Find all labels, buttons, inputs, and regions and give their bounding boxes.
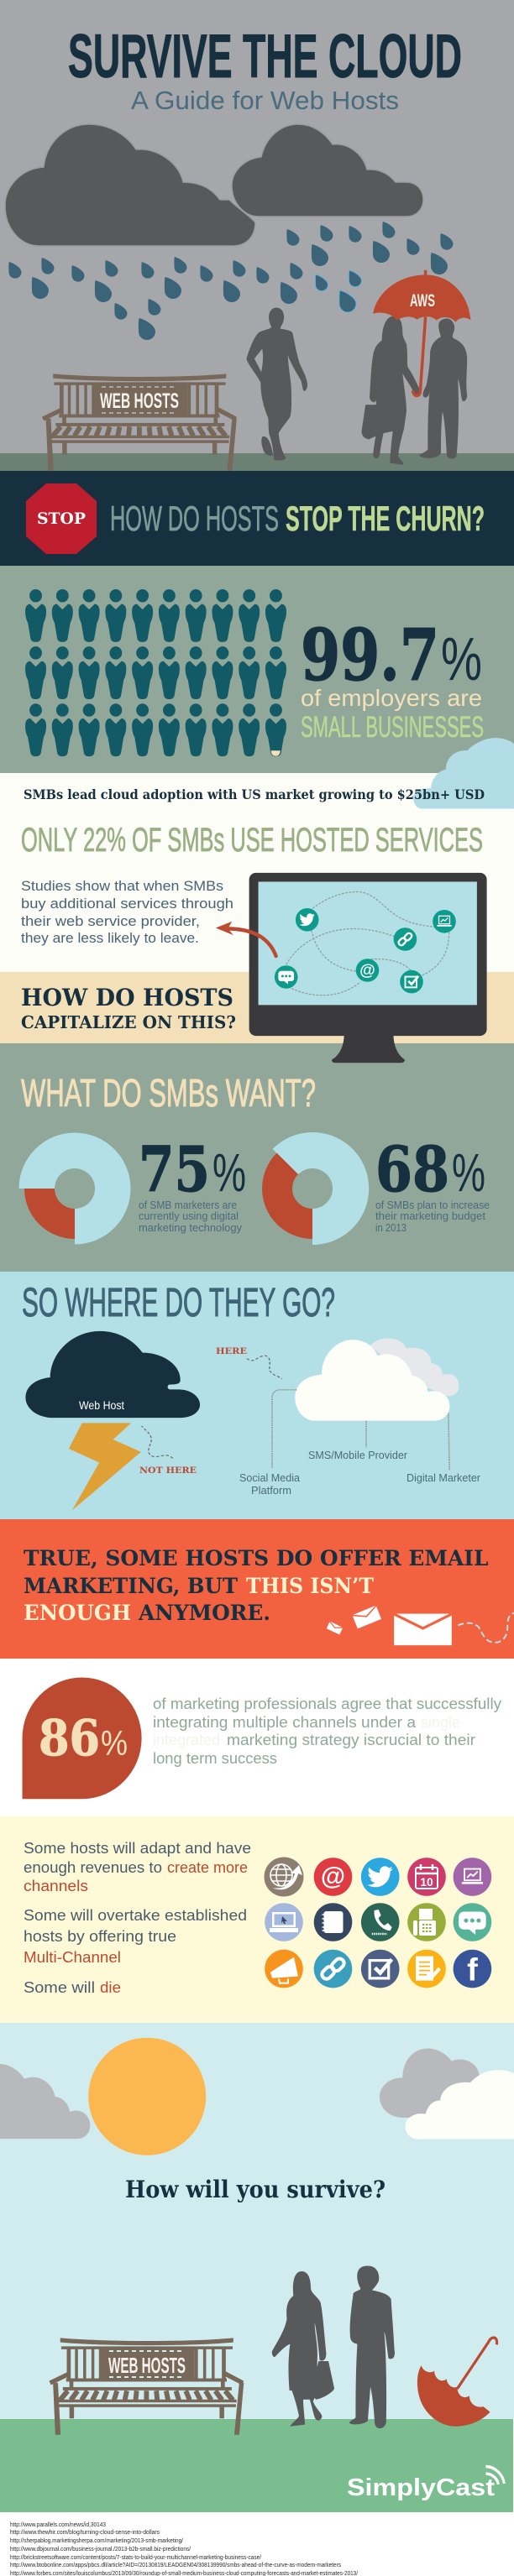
- text: adapt and overtake: Multi-Channel: [24, 1949, 121, 1966]
- text: SMB marketers: currently using digital: [139, 1210, 239, 1222]
- heading: true some hosts: MARKETING, BUT: [24, 1574, 238, 1599]
- icon: link: [314, 1950, 352, 1988]
- panel: sunny closing scene: [0, 2023, 514, 2512]
- person: walking woman: [247, 307, 307, 460]
- heading: how do hosts capitalize: [21, 984, 236, 1032]
- text: adapt and overtake: Some hosts will adapt and have: [24, 1840, 251, 1857]
- icon: large storm cloud: [5, 124, 255, 246]
- panel: stop the churn banner: [0, 471, 514, 566]
- icon: facebook: [454, 1950, 491, 1988]
- icon: telephone: [361, 1903, 400, 1941]
- labels: channel providers: Social Media: [239, 1471, 301, 1484]
- text: studies: Studies show that when SMBs: [21, 878, 223, 894]
- icon: twitter: [361, 1858, 400, 1896]
- text: adapt and overtake: create more: [167, 1859, 248, 1876]
- text: SMBs budget: in 2013: [375, 1222, 406, 1234]
- icon: monitor body: [216, 873, 487, 1063]
- text: marketing professionals: of marketing professionals agree that successfully: [153, 1696, 501, 1712]
- icon: megaphone: [265, 1950, 303, 1988]
- statistic: 68%: %: [452, 1142, 485, 1203]
- icon: laptop cursor: [265, 1903, 303, 1941]
- text: SMB marketers: [139, 1199, 243, 1234]
- person: woman with bag: [272, 2271, 334, 2427]
- icon: web host cloud: [25, 1331, 200, 1418]
- callout: 86%: [23, 1677, 142, 1799]
- text: SMB marketers: of SMB marketers are: [139, 1199, 237, 1211]
- bench: web hosts closing: WEB HOSTS: [108, 2353, 186, 2378]
- callout: 86%: 86: [39, 1709, 100, 1767]
- arrow: not here: [142, 1426, 173, 1458]
- icon: notebook: [314, 1903, 352, 1941]
- panel: rainy scene header: [0, 0, 514, 471]
- panel: what do SMBs want: [0, 1043, 514, 1272]
- icon: stop sign: STOP: [37, 509, 86, 528]
- heading: how will you survive: How will you survive?: [125, 2176, 386, 2203]
- icon: check box: [361, 1950, 400, 1988]
- panel: 86 percent statistic: [0, 1659, 514, 1816]
- heading: how do hosts stop the churn: HOW DO HOSTS: [110, 499, 279, 538]
- bench: web hosts: WEB HOSTS: [100, 389, 179, 413]
- icon: stop sign: [26, 483, 97, 554]
- label: here: HERE: [216, 1346, 247, 1356]
- text: studies: buy additional services through: [21, 896, 233, 912]
- labels: channel providers: SMS/Mobile Provider: [308, 1449, 408, 1461]
- icon: speech node: [275, 965, 297, 989]
- icon: fax: [407, 1903, 446, 1941]
- text: adapt and overtake: [24, 1840, 251, 1996]
- icon: sun: [88, 2038, 206, 2155]
- icon: AWS umbrella: AWS: [410, 291, 435, 311]
- text: marketing professionals: [153, 1696, 501, 1767]
- panel: hosted services: [0, 738, 514, 1043]
- text: marketing professionals: single: [421, 1714, 460, 1731]
- pictogram: people grid: [25, 589, 286, 756]
- text: marketing professionals: integrating multiple channels under a: [153, 1714, 417, 1731]
- text: SMBs budget: their marketing budget: [375, 1210, 486, 1222]
- icon: at node: @: [359, 962, 375, 980]
- label: not here: NOT HERE: [139, 1466, 197, 1476]
- icon: calendar: [407, 1858, 446, 1896]
- heading: true some hosts: THIS ISN’T: [246, 1574, 374, 1599]
- text: adapt and overtake: enough revenues to: [24, 1859, 162, 1876]
- icon: document: [407, 1950, 446, 1988]
- icon: at sign: @: [321, 1863, 345, 1890]
- sources list: [10, 2522, 358, 2576]
- icon: fallen umbrella: [417, 2338, 497, 2427]
- heading: true some hosts: [24, 1546, 489, 1626]
- text: studies: [21, 878, 233, 946]
- text: marketing professionals: marketing strategy iscrucial to their: [227, 1732, 475, 1748]
- icon: at sign: [314, 1858, 352, 1896]
- icon: at node: [356, 959, 379, 982]
- icon: calendar: 10: [420, 1875, 433, 1889]
- icon: globe: [264, 1857, 304, 1897]
- icon: envelopes: [326, 1605, 514, 1645]
- sources list: http://sherpablog.marketingsherpa.com/marketing/2013-smb-marketing/: [10, 2538, 183, 2544]
- icon: twitter node: [296, 908, 319, 932]
- person: woman with bag: [362, 316, 419, 465]
- statistic: 75%: 75: [139, 1134, 210, 1206]
- text: adapt and overtake: die: [100, 1979, 121, 1996]
- icon: small storm cloud: [232, 124, 423, 217]
- labels: channel providers: Digital Marketer: [406, 1471, 481, 1484]
- icon group: monitor with network: [216, 873, 487, 1063]
- heading: true some hosts: ENOUGH: [24, 1601, 131, 1626]
- statistic: 99.7%: 99.7: [301, 614, 439, 697]
- sources list: http://www.btobonline.com/apps/pbcs.dll/article?AID=/20130819/LEADGEN04/308139990/smbs-ahead-of-the-curve-as-modern-marketers: [10, 2563, 341, 2568]
- arrow: here: [247, 1356, 282, 1379]
- heading: how do hosts capitalize: CAPITALIZE ON THIS?: [21, 1012, 236, 1032]
- bench: web hosts: [42, 374, 237, 471]
- text: SMBs budget: of SMBs plan to increase: [375, 1199, 490, 1211]
- heading: true some hosts: ANYMORE.: [138, 1601, 270, 1626]
- text: marketing professionals: integrated: [153, 1732, 220, 1748]
- icon: web host cloud: Web Host: [79, 1398, 124, 1412]
- text: cloud adoption: SMBs lead cloud adoption with US market growing to $25bn+ USD: [24, 786, 485, 802]
- sources list: http://brickstreetsoftware.com/content/posts/7-stats-to-build-your-multichannel-marketing-business-case/: [10, 2555, 261, 2561]
- icon: laptop chart: [454, 1858, 491, 1896]
- panel: email marketing banner: [0, 1519, 514, 1659]
- heading: what do SMBs want: WHAT DO SMBs WANT?: [21, 1071, 316, 1115]
- icon: white cloud: [272, 1338, 459, 1470]
- text: SMBs budget: [375, 1199, 490, 1234]
- text: adapt and overtake: hosts by offering true: [24, 1928, 176, 1945]
- chart: donut 75%: [18, 1133, 131, 1244]
- panel: so where do they go: [0, 1272, 514, 1519]
- labels: channel providers: Platform: [251, 1484, 291, 1497]
- text: adapt and overtake: Some will: [24, 1979, 95, 1996]
- heading: how do hosts capitalize: HOW DO HOSTS: [21, 984, 233, 1011]
- icon: check node: [400, 970, 423, 993]
- statistic: 75%: %: [212, 1142, 246, 1203]
- callout: 86%: %: [101, 1723, 128, 1763]
- bench: web hosts closing: [49, 2338, 244, 2435]
- labels: channel providers: [239, 1449, 481, 1497]
- person: man: [349, 2266, 395, 2428]
- panel: small business statistic: [0, 566, 514, 773]
- text: studies: they are less likely to leave.: [21, 930, 199, 946]
- text: studies: their web service provider,: [21, 913, 200, 929]
- text: SMB marketers: marketing technology: [139, 1222, 243, 1234]
- icon: link node: [394, 927, 417, 951]
- text: marketing professionals: long term success: [153, 1750, 277, 1767]
- icon: facebook: f: [467, 1953, 478, 1988]
- sources list: http://www.parallels.com/news/id,30143: [10, 2522, 106, 2528]
- icon: clouds right: [380, 2049, 514, 2139]
- statistic: 68%: 68: [375, 1134, 449, 1206]
- sources list: http://www.thewhir.com/blog/turning-cloud-sense-into-dollars: [10, 2530, 160, 2536]
- text: adapt and overtake: channels: [24, 1878, 88, 1894]
- icon: speech bubble: [454, 1903, 491, 1941]
- statistic: 99.7%: %: [441, 626, 482, 693]
- icon: pale blue cloud: [413, 738, 514, 809]
- sources list: http://www.dbjournal.com/business-journal./2013-b2b-small.biz-predictions/: [10, 2547, 191, 2552]
- text: of employers are: of employers are: [301, 685, 482, 711]
- logo: SimplyCast: SimplyCast: [347, 2474, 495, 2501]
- icon: chart node: [433, 910, 456, 933]
- icon: AWS umbrella: [373, 270, 470, 395]
- chart: donut 68%: [262, 1132, 369, 1245]
- icon grid: marketing channels: [264, 1857, 491, 1988]
- heading: true some hosts: TRUE, SOME HOSTS DO OFFER EMAIL: [24, 1546, 489, 1571]
- icon: gray cloud left: [0, 2064, 90, 2139]
- person: man: [419, 318, 467, 459]
- text: adapt and overtake: Some will overtake established: [24, 1907, 247, 1924]
- logo: SimplyCast: [347, 2466, 504, 2501]
- panel: some hosts will adapt: [0, 1816, 514, 2023]
- subtitle: A Guide for Web Hosts: [131, 86, 399, 115]
- heading: so where do they go: SO WHERE DO THEY GO?: [22, 1281, 335, 1325]
- rain drops: [8, 222, 453, 340]
- icon: lightning bolt: [69, 1423, 141, 1510]
